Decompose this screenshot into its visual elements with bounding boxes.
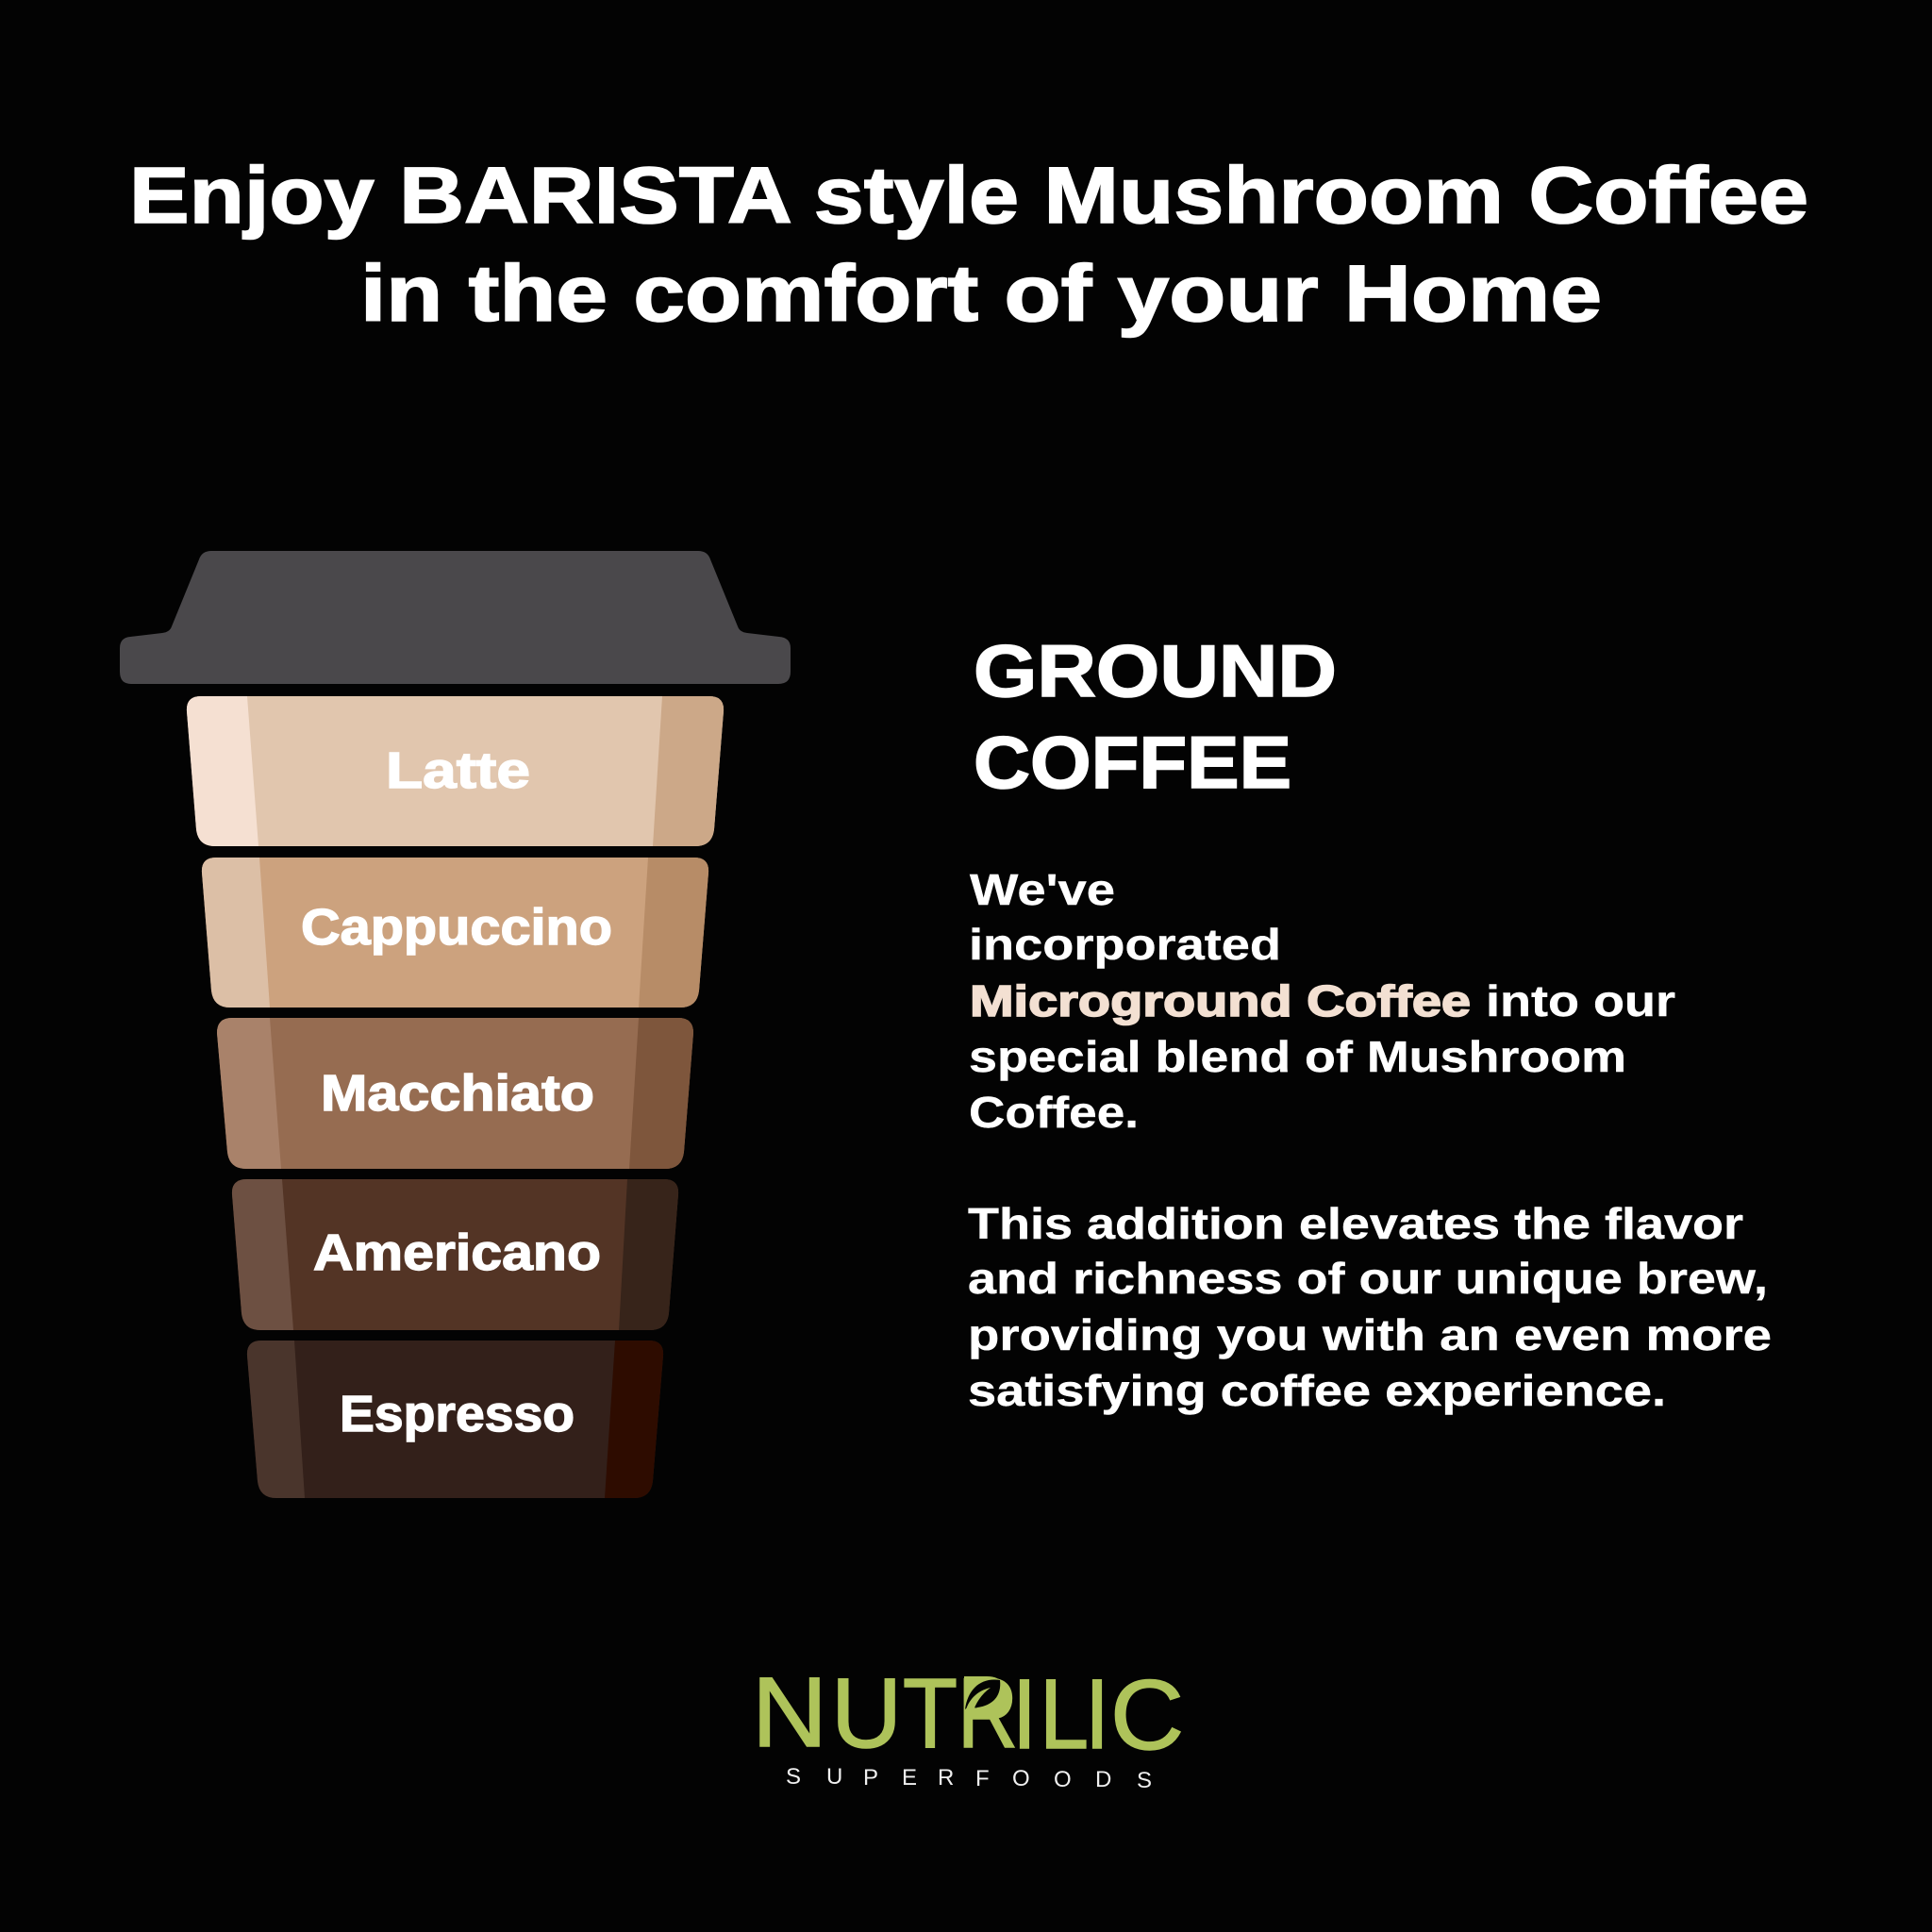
text block: flavor and richness: satisfying coffee experience. <box>968 1366 1666 1415</box>
cup layer: Americano: Americano <box>313 1224 601 1281</box>
cup layer: Cappuccino: Cappuccino <box>301 899 612 956</box>
text block: microground coffee intro: special blend of Mushroom <box>969 1032 1626 1081</box>
logo wordmark: I <box>1012 1659 1037 1770</box>
text block: flavor and richness <box>968 1199 1772 1415</box>
cup layer: Americano <box>232 1179 678 1330</box>
heading: ground coffee: COFFEE <box>974 721 1291 804</box>
text block: microground coffee intro: We've <box>970 865 1115 914</box>
cup layer: Espresso <box>247 1341 663 1498</box>
cup layer: Espresso: Espresso <box>340 1386 575 1442</box>
cup lid <box>120 551 791 684</box>
title: in the comfort of your Home <box>360 249 1602 338</box>
logo wordmark: N <box>752 1657 827 1768</box>
text block: flavor and richness: providing you with an even more <box>968 1310 1772 1359</box>
heading: ground coffee <box>974 629 1337 804</box>
text block: microground coffee intro <box>969 865 1675 1137</box>
coffee cup illustration <box>120 551 791 1498</box>
cup layer: Macchiato <box>217 1018 693 1169</box>
text block: flavor and richness: This addition elevates the flavor <box>968 1199 1743 1248</box>
logo tagline: SUPERFOODS <box>786 1764 1152 1793</box>
logo wordmark: C <box>1110 1660 1184 1771</box>
text block: microground coffee intro: incorporated <box>969 920 1281 969</box>
cup layer: Macchiato: Macchiato <box>321 1065 594 1122</box>
cup layer: Cappuccino <box>202 858 708 1008</box>
logo wordmark: L <box>1040 1659 1089 1770</box>
text block: microground coffee intro: into our <box>1486 976 1675 1025</box>
logo wordmark: T <box>903 1658 958 1769</box>
text block: microground coffee intro: Microground Coffee <box>970 976 1471 1025</box>
brand logo: Nutrilic Superfoods <box>752 1657 1184 1793</box>
text block: flavor and richness: and richness of our unique brew, <box>968 1254 1768 1303</box>
icon: leaf in R <box>964 1676 1006 1713</box>
logo wordmark: I <box>1085 1659 1109 1770</box>
title: Enjoy BARISTA style Mushroom Coffee <box>129 151 1808 240</box>
heading: ground coffee: GROUND <box>974 629 1337 712</box>
logo wordmark: R <box>958 1658 1018 1769</box>
cup layer: Latte: Latte <box>386 742 530 799</box>
text block: microground coffee intro: Coffee. <box>969 1088 1139 1137</box>
logo wordmark: U <box>831 1658 902 1769</box>
title <box>129 151 1808 338</box>
logo wordmark <box>752 1657 1184 1771</box>
cup layer: Latte <box>187 696 724 846</box>
